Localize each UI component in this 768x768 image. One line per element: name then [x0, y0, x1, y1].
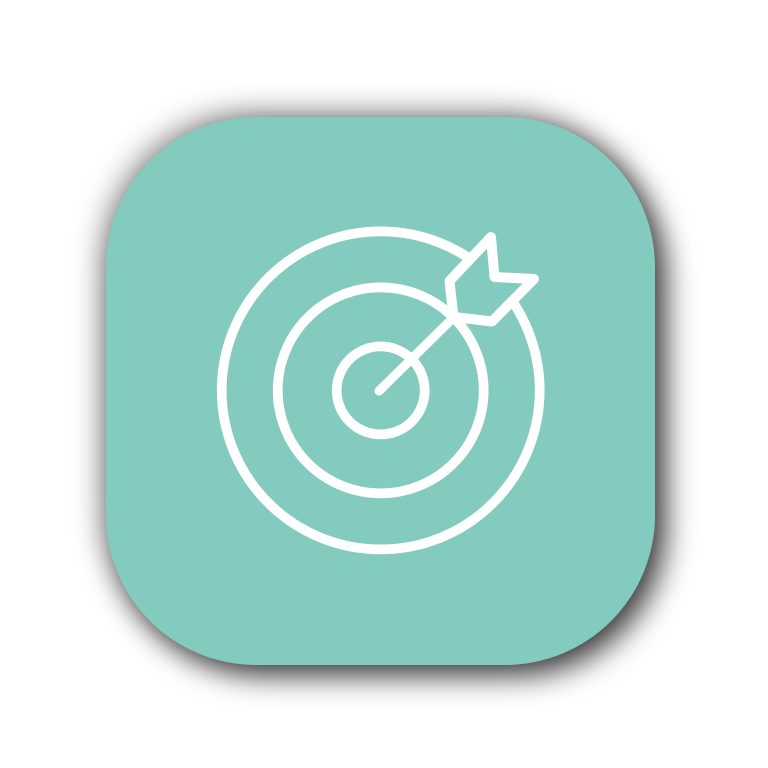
arrow: fletching	[450, 237, 534, 322]
target: concentric rings	[222, 231, 540, 549]
panel: rounded teal tile with shadow	[106, 117, 655, 665]
arrow: shaft	[379, 318, 453, 391]
